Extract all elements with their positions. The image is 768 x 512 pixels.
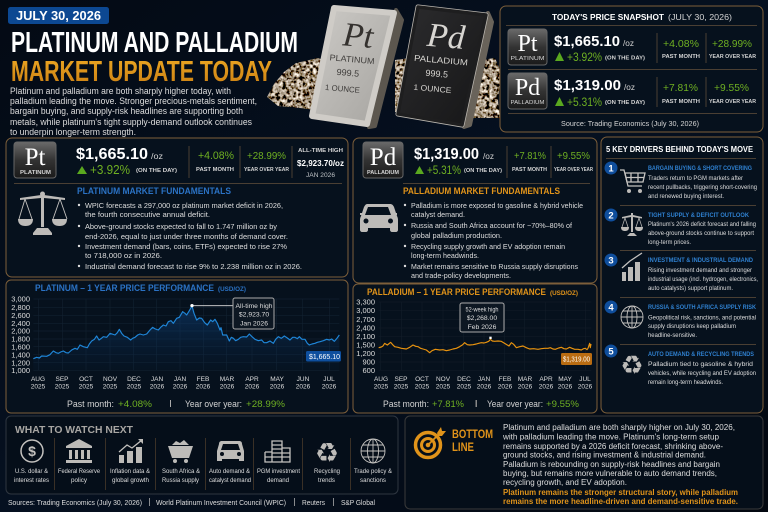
platinum callout: Jan 2026 <box>240 320 268 328</box>
palladium fundamentals text: long-term headwinds. <box>411 251 479 260</box>
platinum stats: /oz <box>151 151 163 161</box>
driver 1: BARGAIN BUYING & SHORT COVERING <box>648 166 752 172</box>
title: MARKET UPDATE TODAY <box>11 56 272 88</box>
platinum stats <box>76 146 344 179</box>
platinum x axis: APR <box>245 376 259 383</box>
platinum stats: (ON THE DAY) <box>136 168 177 174</box>
driver 3: auto catalysts) support platinum. <box>648 285 733 292</box>
hero: metal nuggets <box>267 58 501 118</box>
platinum x axis: 2025 <box>103 384 118 390</box>
palladium price row: +5.31% <box>567 97 602 109</box>
palladium y axis: 1,500 <box>356 340 375 350</box>
platinum callout: $2,923.70 <box>239 312 269 318</box>
bottom line text: Platinum remains the stronger structural story, while palladium <box>503 488 738 497</box>
platinum x axis: 2026 <box>322 384 337 390</box>
hero: platinum bar <box>312 8 402 127</box>
platinum x axis: 2025 <box>55 384 70 390</box>
driver 5 <box>604 344 756 386</box>
badge: platinum: Pt <box>517 31 538 57</box>
platinum x axis: JUL <box>323 376 335 383</box>
platinum y axis: 1,400 <box>11 350 30 360</box>
palladium stats: YEAR OVER YEAR <box>554 167 593 173</box>
palladium stats <box>414 146 593 177</box>
badge: platinum: Pt <box>25 144 45 171</box>
palladium fundamentals text: PALLADIUM MARKET FUNDAMENTALS <box>403 186 560 196</box>
platinum x axis: 2026 <box>296 384 311 390</box>
palladium performance summary: +9.55% <box>546 399 580 410</box>
sources line <box>8 498 375 507</box>
driver 1: 1 <box>608 164 614 174</box>
snapshot heading: (JULY 30, 2026) <box>668 12 732 22</box>
palladium stats: PAST MONTH <box>512 167 547 173</box>
driver 3: INVESTMENT & INDUSTRIAL DEMAND <box>648 258 754 264</box>
palladium stats: /oz <box>483 151 494 161</box>
badge: palladium: Pd <box>515 75 540 101</box>
watch item: Federal Reserve: Federal Reserve <box>58 468 101 475</box>
platinum stats: +3.92% <box>90 163 130 177</box>
snapshot source: Source: Trading Economics (July 30, 2026) <box>561 119 699 128</box>
hero: platinum bar: 999.5 <box>336 67 360 79</box>
platinum x axis: 2025 <box>127 384 142 390</box>
driver 1: recent pullbacks, triggering short-covering <box>648 184 757 191</box>
palladium x axis: SEP <box>394 376 408 383</box>
driver 2: long-term prices. <box>648 239 691 246</box>
watch item: US dollar <box>14 440 49 484</box>
intro text: palladium leading the move. Stronger precious-metals sentiment, <box>10 96 257 106</box>
palladium fundamentals text <box>403 186 583 280</box>
palladium stats: +9.55% <box>557 151 590 162</box>
palladium performance summary: +7.81% <box>432 399 465 410</box>
palladium callout: Feb 2026 <box>468 324 497 331</box>
watch item: recycling: ♻ <box>315 438 339 469</box>
palladium fundamentals text: and trade-policy developments. <box>411 271 511 280</box>
intro text: metals, while platinum's tight supply-demand outlook continues <box>10 117 253 127</box>
palladium callout: $2,268.00 <box>467 315 497 322</box>
palladium fundamentals text: catalyst demand. <box>411 210 465 219</box>
platinum x axis: SEP <box>55 376 69 383</box>
badge: palladium <box>508 73 547 109</box>
platinum performance summary: +28.99% <box>246 399 286 410</box>
platinum performance summary <box>67 399 286 410</box>
badge: palladium: PALLADIUM <box>367 170 399 176</box>
palladium price row: $1,319.00 <box>554 77 621 94</box>
palladium x axis: JUL <box>579 376 591 383</box>
badge: palladium <box>363 142 403 178</box>
watch item: mining cart <box>162 440 201 484</box>
platinum price row <box>554 33 756 64</box>
palladium x axis: APR <box>539 376 553 383</box>
driver 5: 5 <box>608 346 614 358</box>
palladium y axis: 3,000 <box>356 306 375 315</box>
hero: platinum bar: PLATINUM <box>329 52 375 66</box>
watch item: Federal Reserve <box>58 439 101 484</box>
palladium y axis: 1,200 <box>356 349 375 358</box>
platinum price row: (ON THE DAY) <box>605 56 645 62</box>
palladium price row <box>554 77 756 109</box>
platinum x axis: JUN <box>297 376 310 383</box>
watch item: Federal Reserve: policy <box>71 477 88 484</box>
watch item: recycling <box>314 438 341 484</box>
platinum stats: YEAR OVER YEAR <box>244 167 289 173</box>
driver 1: and renewed buying interest. <box>648 193 724 200</box>
platinum x axis: 2026 <box>245 384 260 390</box>
badge: palladium: Pd <box>370 144 397 171</box>
platinum x axis: JAN <box>174 376 186 383</box>
badge: platinum: PLATINUM <box>20 170 51 176</box>
icon: target <box>416 427 446 458</box>
platinum callout: All-time high <box>236 303 273 310</box>
driver 4: RUSSIA & SOUTH AFRICA SUPPLY RISK <box>648 305 757 311</box>
panel: today's price snapshot <box>500 6 763 132</box>
bottom line text: buying, but remains more vulnerable to auto demand trends, <box>503 469 717 478</box>
platinum x axis <box>31 376 337 390</box>
palladium price row: /oz <box>624 82 635 92</box>
platinum performance summary: +4.08% <box>118 399 153 410</box>
platinum price row: +28.99% <box>712 38 752 50</box>
intro text: Platinum and palladium are both sharply higher today, with <box>10 86 231 96</box>
palladium x axis: 2026 <box>539 384 554 390</box>
palladium fundamentals text: Palladium is more exposed to gasoline & hybrid vehicle <box>411 201 583 210</box>
platinum fundamentals text: Industrial demand forecast to rise 9% to 2.238 million oz in 2026. <box>85 262 302 271</box>
platinum y axis: 3,000 <box>11 294 30 304</box>
palladium x axis: 2026 <box>498 384 513 390</box>
platinum y axis: 1,600 <box>11 342 30 352</box>
platinum stats: ALL-TIME HIGH <box>298 148 343 154</box>
palladium stats: +7.81% <box>514 151 546 162</box>
driver 5: AUTO DEMAND & RECYCLING TRENDS <box>648 352 754 358</box>
platinum x axis: 2026 <box>196 384 211 390</box>
platinum x axis: 2026 <box>220 384 235 390</box>
hero: palladium bar: 1 OUNCE <box>413 83 452 95</box>
driver 5: ♻ <box>620 351 644 381</box>
platinum x axis: JAN <box>151 376 163 383</box>
watch item: trade policy <box>354 439 393 484</box>
badge: platinum <box>14 142 56 178</box>
panel: what to watch next <box>6 416 398 494</box>
badge: platinum: PLATINUM <box>510 56 545 62</box>
palladium price label <box>561 353 592 365</box>
platinum y axis <box>11 294 30 375</box>
palladium x axis: 2025 <box>394 384 409 390</box>
watch item: US dollar: interest rates <box>14 477 49 484</box>
palladium y axis: 900 <box>362 358 375 366</box>
sources line: S&P Global <box>341 500 375 507</box>
panel: palladium fundamentals <box>353 138 597 283</box>
palladium fundamentals text: global palladium production. <box>411 231 502 240</box>
platinum performance summary: Year over year: <box>185 399 242 410</box>
platinum y axis: 2,000 <box>11 326 30 336</box>
driver 5: remain long-term headwinds. <box>648 379 723 386</box>
bottom line text: Palladium is rebounding on supply-risk headlines and bargain <box>503 460 720 469</box>
sources line: World Platinum Investment Council (WPIC) <box>156 500 286 507</box>
snapshot heading: TODAY'S PRICE SNAPSHOT <box>552 12 665 22</box>
driver 2: above-ground stocks continue to support <box>648 230 754 237</box>
bottom line heading: LINE <box>452 440 474 454</box>
driver 2: Platinum's 2026 deficit forecast and falling <box>648 221 756 228</box>
platinum fundamentals text: to 718,000 oz in 2026. <box>85 251 162 260</box>
platinum y axis: 2,800 <box>11 303 30 312</box>
platinum stats: +4.08% <box>198 150 234 162</box>
palladium y axis: 600 <box>362 366 375 375</box>
badge: platinum <box>508 29 547 65</box>
platinum fundamentals text: the fourth consecutive annual deficit. <box>85 210 210 219</box>
platinum x axis: MAY <box>270 376 284 383</box>
bottom line text: with palladium leading the move. Platinum's long-term setup <box>502 432 720 442</box>
platinum line chart <box>33 299 339 370</box>
watch item: trade policy: Trade policy & <box>354 468 393 475</box>
watch item: PGM investment <box>257 441 300 484</box>
palladium y axis: 2,400 <box>356 324 375 332</box>
sources line: Reuters <box>302 500 325 507</box>
platinum y axis: 1,800 <box>11 334 30 344</box>
platinum x axis: OCT <box>79 376 93 383</box>
platinum fundamentals text: WPIC forecasts a 297,000 oz platinum market deficit in 2026, <box>85 201 283 210</box>
palladium x axis <box>374 376 593 390</box>
watch item: mining cart: Russia supply <box>162 477 200 484</box>
driver 2: TIGHT SUPPLY & DEFICIT OUTLOOK <box>648 213 750 219</box>
driver 1: Traders return to PGM markets after <box>648 175 744 182</box>
platinum fundamentals text: Investment demand (bars, coins, ETFs) expected to rise 27% <box>85 242 287 251</box>
bottom line text: Platinum and palladium are both sharply higher on July 30, 2026, <box>503 423 735 432</box>
platinum stats: $2,923.70/oz <box>297 159 344 168</box>
driver 4 <box>604 300 757 339</box>
platinum y axis: 1,000 <box>11 366 30 375</box>
intro text <box>10 86 257 137</box>
platinum fundamentals text: end-2026, equal to just under three months of demand cover. <box>85 232 288 241</box>
hero: palladium bar: Pd <box>425 17 467 57</box>
palladium x axis: 2026 <box>518 384 533 390</box>
palladium stats: (ON THE DAY) <box>464 168 502 174</box>
palladium x axis: AUG <box>374 376 388 383</box>
bottom line text <box>502 423 738 506</box>
palladium chart title: PALLADIUM – 1 YEAR PRICE PERFORMANCE <box>367 287 546 297</box>
platinum y axis: 1,200 <box>11 358 30 368</box>
platinum price label: $1,665.10 <box>309 352 340 361</box>
panel: platinum chart <box>6 280 348 413</box>
palladium callout: 52-week high <box>466 306 499 314</box>
platinum x axis: AUG <box>31 376 45 383</box>
palladium x axis: MAY <box>558 376 572 383</box>
palladium performance summary <box>383 399 580 410</box>
driver 5: vehicles, while recycling and EV adoption <box>648 370 756 377</box>
watch item: auto <box>209 441 252 484</box>
palladium price row: +7.81% <box>663 82 698 94</box>
date badge: JULY 30, 2026 <box>16 8 101 23</box>
platinum price row: +3.92% <box>567 52 602 64</box>
platinum x axis: 2025 <box>31 384 46 390</box>
palladium x axis: 2026 <box>477 384 492 390</box>
palladium price row: PAST MONTH <box>662 99 700 105</box>
platinum x axis: FEB <box>197 376 209 383</box>
panel: platinum fundamentals <box>6 138 348 277</box>
platinum x axis: 2026 <box>270 384 285 390</box>
palladium fundamentals text: Recycling supply growth and EV adoption remain <box>411 242 565 251</box>
platinum x axis: NOV <box>103 376 118 383</box>
palladium price row: (ON THE DAY) <box>605 100 645 106</box>
platinum fundamentals text <box>77 186 302 271</box>
driver 5: Palladium tied to gasoline & hybrid <box>648 361 753 368</box>
driver 3 <box>604 253 758 292</box>
watch item: auto: catalyst demand <box>209 477 252 484</box>
palladium x axis: 2026 <box>558 384 573 390</box>
platinum x axis: 2026 <box>173 384 188 390</box>
watch item: recycling: Recycling <box>314 468 341 475</box>
hero: palladium bar: PALLADIUM <box>414 53 468 67</box>
platinum fundamentals text: Above-ground stocks expected to fall to 1.747 million oz by <box>85 222 277 231</box>
platinum stats: $1,665.10 <box>76 146 148 163</box>
palladium fundamentals text: Market remains sensitive to Russia supply disruptions <box>411 262 578 271</box>
palladium x axis: NOV <box>436 376 451 383</box>
palladium x axis: JAN <box>478 376 490 383</box>
platinum price row: YEAR OVER YEAR <box>709 54 756 60</box>
palladium fundamentals text: Russia and South Africa account for ~70%–80% of <box>411 221 573 230</box>
palladium y axis <box>356 298 375 375</box>
driver 1 <box>604 162 757 200</box>
title: PLATINUM AND PALLADIUM <box>11 27 298 59</box>
palladium x axis: DEC <box>457 376 471 383</box>
bottom line text: remains the more headline-driven and demand-sensitive trade. <box>503 497 738 506</box>
watch item: US dollar: $ <box>28 443 36 459</box>
palladium price row: YEAR OVER YEAR <box>709 99 756 105</box>
palladium chart title: (USD/OZ) <box>550 291 578 297</box>
platinum y axis: 2,600 <box>11 311 30 320</box>
driver 3: Rising investment demand and stronger <box>648 267 753 274</box>
palladium x axis: FEB <box>499 376 511 383</box>
platinum price row: /oz <box>623 38 634 48</box>
watch item: mining cart: South Africa & <box>162 468 201 475</box>
driver 2 <box>604 208 756 246</box>
palladium x axis: 2025 <box>374 384 389 390</box>
driver 4: 4 <box>608 302 614 314</box>
platinum price row: $1,665.10 <box>554 33 620 50</box>
palladium price row: +9.55% <box>714 82 749 94</box>
palladium x axis: OCT <box>415 376 429 383</box>
palladium x axis: 2025 <box>415 384 430 390</box>
watch item: inflation: Inflation data & <box>110 468 151 475</box>
platinum fundamentals text: PLATINUM MARKET FUNDAMENTALS <box>77 186 231 196</box>
watch item: PGM investment: PGM investment <box>257 468 300 475</box>
bottom line text: recycling growth, and EV adoption. <box>503 478 627 487</box>
driver 2: 2 <box>608 210 614 222</box>
platinum callout <box>233 298 274 329</box>
watch item: auto: Auto demand & <box>209 468 251 475</box>
hero: platinum bar: 1 OUNCE <box>325 83 360 95</box>
driver 3: 3 <box>608 256 614 266</box>
hero: palladium bar: 999.5 <box>425 68 448 80</box>
platinum stats: +28.99% <box>247 150 286 162</box>
watch item: US dollar: U.S. dollar & <box>15 468 49 475</box>
intro text: to underpin longer-term strength. <box>10 127 136 137</box>
platinum chart title: PLATINUM – 1 YEAR PRICE PERFORMANCE <box>35 283 214 293</box>
sources line: Sources: Trading Economics (July 30, 2026) <box>8 500 142 507</box>
palladium performance summary: Past month: <box>383 399 429 410</box>
palladium price label: $1,319.00 <box>563 356 590 364</box>
bottom line text: ground stocks, and rising investment & industrial demand. <box>503 450 706 460</box>
platinum x axis: MAR <box>220 376 235 383</box>
panel: palladium chart <box>353 284 597 413</box>
platinum y axis: 2,400 <box>11 319 30 328</box>
watch item: trade policy: sanctions <box>360 477 386 484</box>
watch heading: WHAT TO WATCH NEXT <box>15 424 134 436</box>
badge: palladium: PALLADIUM <box>510 100 545 106</box>
hero: palladium bar <box>398 7 492 127</box>
platinum x axis: 2025 <box>79 384 94 390</box>
platinum x axis: 2026 <box>150 384 165 390</box>
driver 4: Geopolitical risk, sanctions, and potential <box>648 314 756 322</box>
bottom line heading: BOTTOM <box>452 427 493 441</box>
palladium stats: $1,319.00 <box>414 146 479 163</box>
panel: 5 key drivers <box>601 137 763 413</box>
palladium line chart <box>379 302 591 370</box>
watch item: inflation <box>110 439 151 484</box>
palladium x axis: MAR <box>518 376 533 383</box>
watch item: recycling: trends <box>318 477 335 484</box>
platinum price row: PAST MONTH <box>662 54 700 60</box>
intro text: bargain buying, and supply-risk headlines are supporting both <box>10 106 243 116</box>
palladium callout <box>460 303 504 332</box>
palladium x axis: 2025 <box>436 384 451 390</box>
platinum chart title: (USD/OZ) <box>218 287 246 293</box>
icon: car <box>360 204 398 232</box>
platinum performance summary: Past month: <box>67 399 114 410</box>
palladium x axis: 2025 <box>457 384 472 390</box>
platinum stats: JAN 2026 <box>306 173 336 179</box>
bottom line text: remains supported by a 2026 deficit forecast, shrinking above- <box>503 442 723 451</box>
palladium x axis: 2026 <box>578 384 593 390</box>
palladium performance summary: Year over year: <box>487 399 543 410</box>
watch item: PGM investment: demand <box>267 477 290 484</box>
driver 4: headline-sensitive. <box>648 332 697 339</box>
palladium y axis: 2,100 <box>356 332 375 341</box>
platinum price row: +4.08% <box>663 38 699 50</box>
icon: balance scale <box>18 192 67 235</box>
palladium y axis: 3,300 <box>356 298 375 306</box>
drivers heading: 5 KEY DRIVERS BEHIND TODAY'S MOVE <box>606 144 753 154</box>
driver 4: supply disruptions keep palladium <box>648 323 736 330</box>
watch item: inflation: global growth <box>112 477 150 484</box>
hero: platinum bar: Pt <box>340 16 376 56</box>
bottom line heading <box>452 427 493 454</box>
platinum x axis: DEC <box>127 376 141 383</box>
palladium y axis: 2,700 <box>356 315 375 324</box>
title <box>11 27 298 88</box>
snapshot heading <box>552 12 732 22</box>
panel: bottom line <box>405 416 763 509</box>
palladium stats: +5.31% <box>427 165 461 177</box>
platinum stats: PAST MONTH <box>196 167 234 173</box>
